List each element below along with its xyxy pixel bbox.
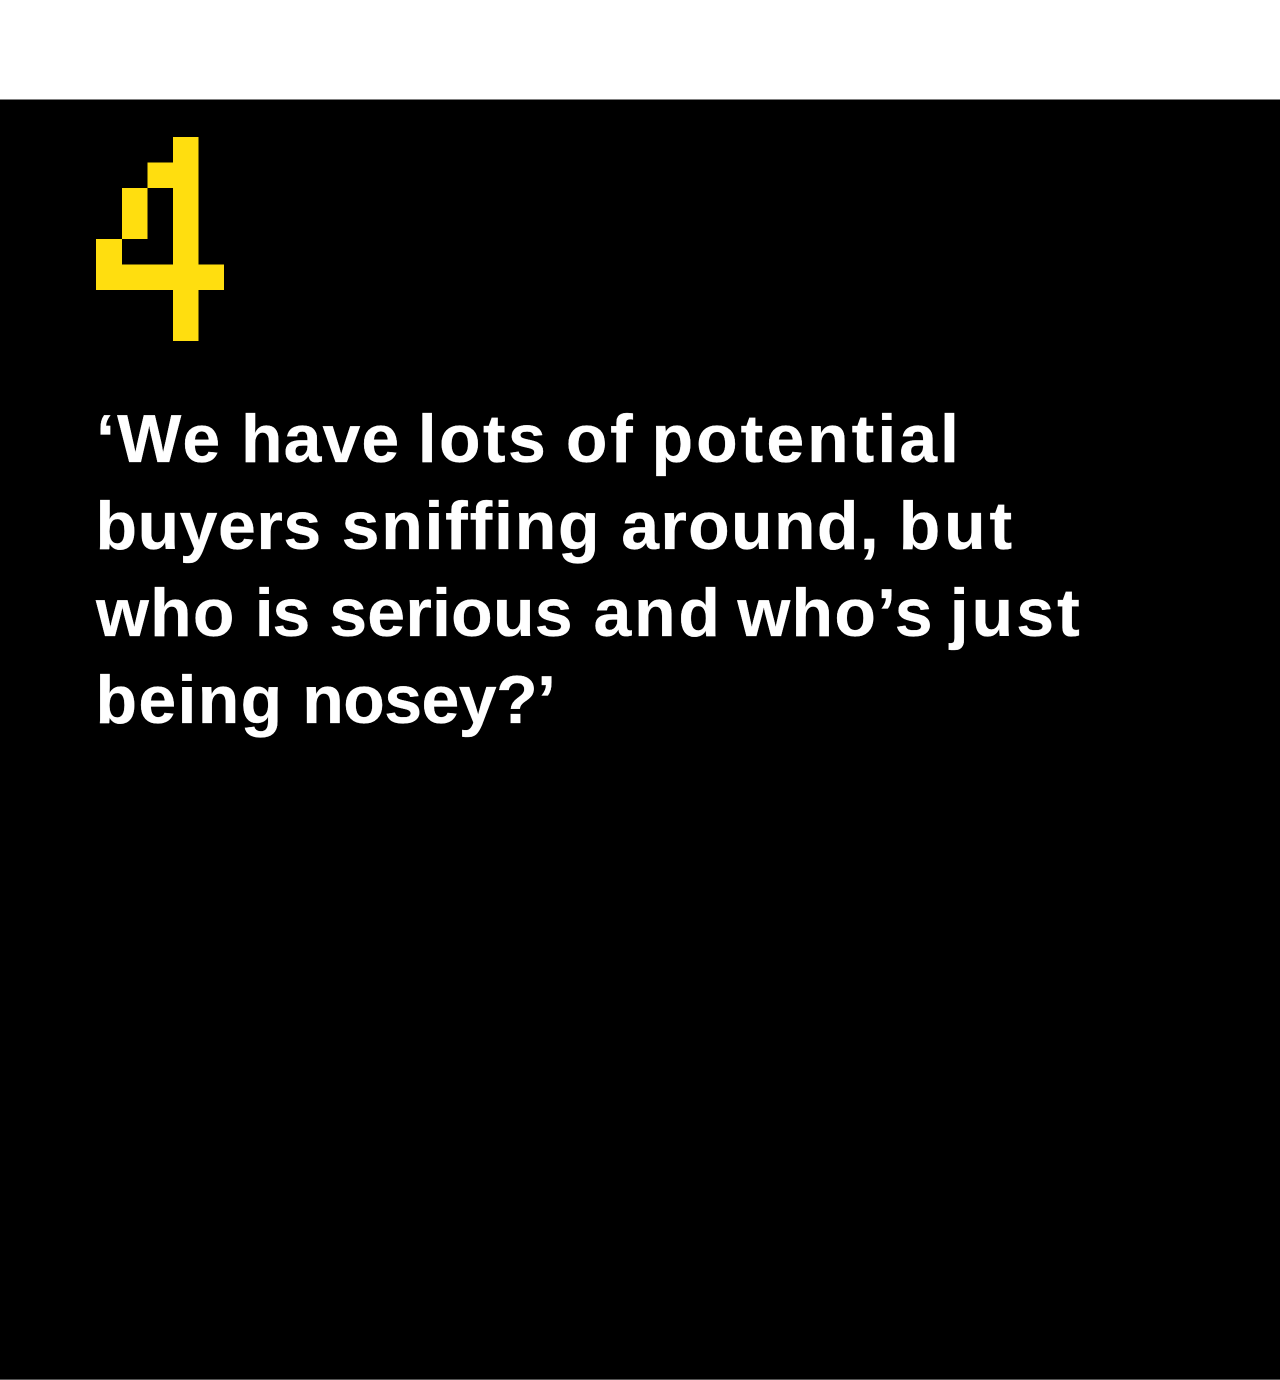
quote text: just <box>950 575 1083 651</box>
quote text: of <box>566 401 636 477</box>
quote text: have <box>241 401 400 477</box>
quote text: who <box>96 575 236 651</box>
quote text: potential <box>652 401 962 477</box>
quote text: serious <box>329 575 573 651</box>
quote text: sniffing <box>342 488 601 564</box>
quote text <box>96 401 1083 738</box>
quote text: is <box>255 575 309 651</box>
quote text: around, <box>621 488 880 564</box>
quote text: lots <box>418 401 548 477</box>
quote text: ‘We <box>96 401 222 477</box>
quote text: but <box>899 488 1016 564</box>
quote text: nosey?’ <box>302 662 555 738</box>
quote text: who’s <box>737 575 934 651</box>
quote text: and <box>594 575 723 651</box>
icon: pixel number 4 <box>96 137 224 341</box>
quote text: being <box>96 662 284 738</box>
quote text: buyers <box>96 488 322 564</box>
